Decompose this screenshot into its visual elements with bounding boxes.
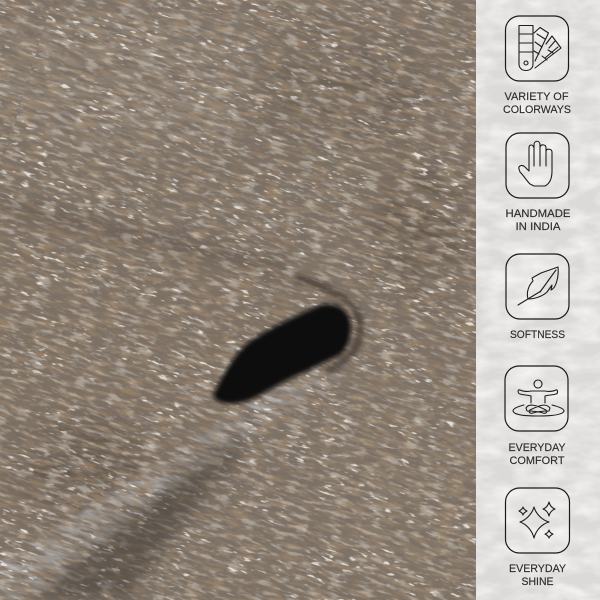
label: everyday comfort: COMFORT [510,455,565,467]
yarn strand texture [1,50,462,600]
icon: sparkles [506,488,570,553]
label: handmade in india [506,208,570,233]
label: variety of colorways [503,91,571,116]
icon: feather [506,254,569,319]
roll of folded rug [0,205,362,565]
panel: feature sidebar [476,0,600,600]
label: everyday comfort: EVERYDAY [508,442,566,454]
label: everyday shine [509,563,567,588]
label: variety of colorways: COLORWAYS [503,104,571,116]
shadow under the fold [30,435,244,600]
icon: raised hand [506,133,569,198]
label: everyday comfort [508,442,566,467]
label: everyday shine: SHINE [522,576,554,588]
label: handmade in india: IN INDIA [516,221,561,233]
label: everyday shine: EVERYDAY [509,563,567,575]
label: handmade in india: HANDMADE [506,208,570,220]
label: softness: SOFTNESS [510,329,565,341]
label: variety of colorways: VARIETY OF [504,91,569,103]
icon: meditating figure [505,366,568,431]
icon: colour fan deck [506,16,568,81]
dark opening of the roll [213,304,351,404]
lower grey fold band [0,360,350,600]
photo: woven rug texture [0,0,476,600]
